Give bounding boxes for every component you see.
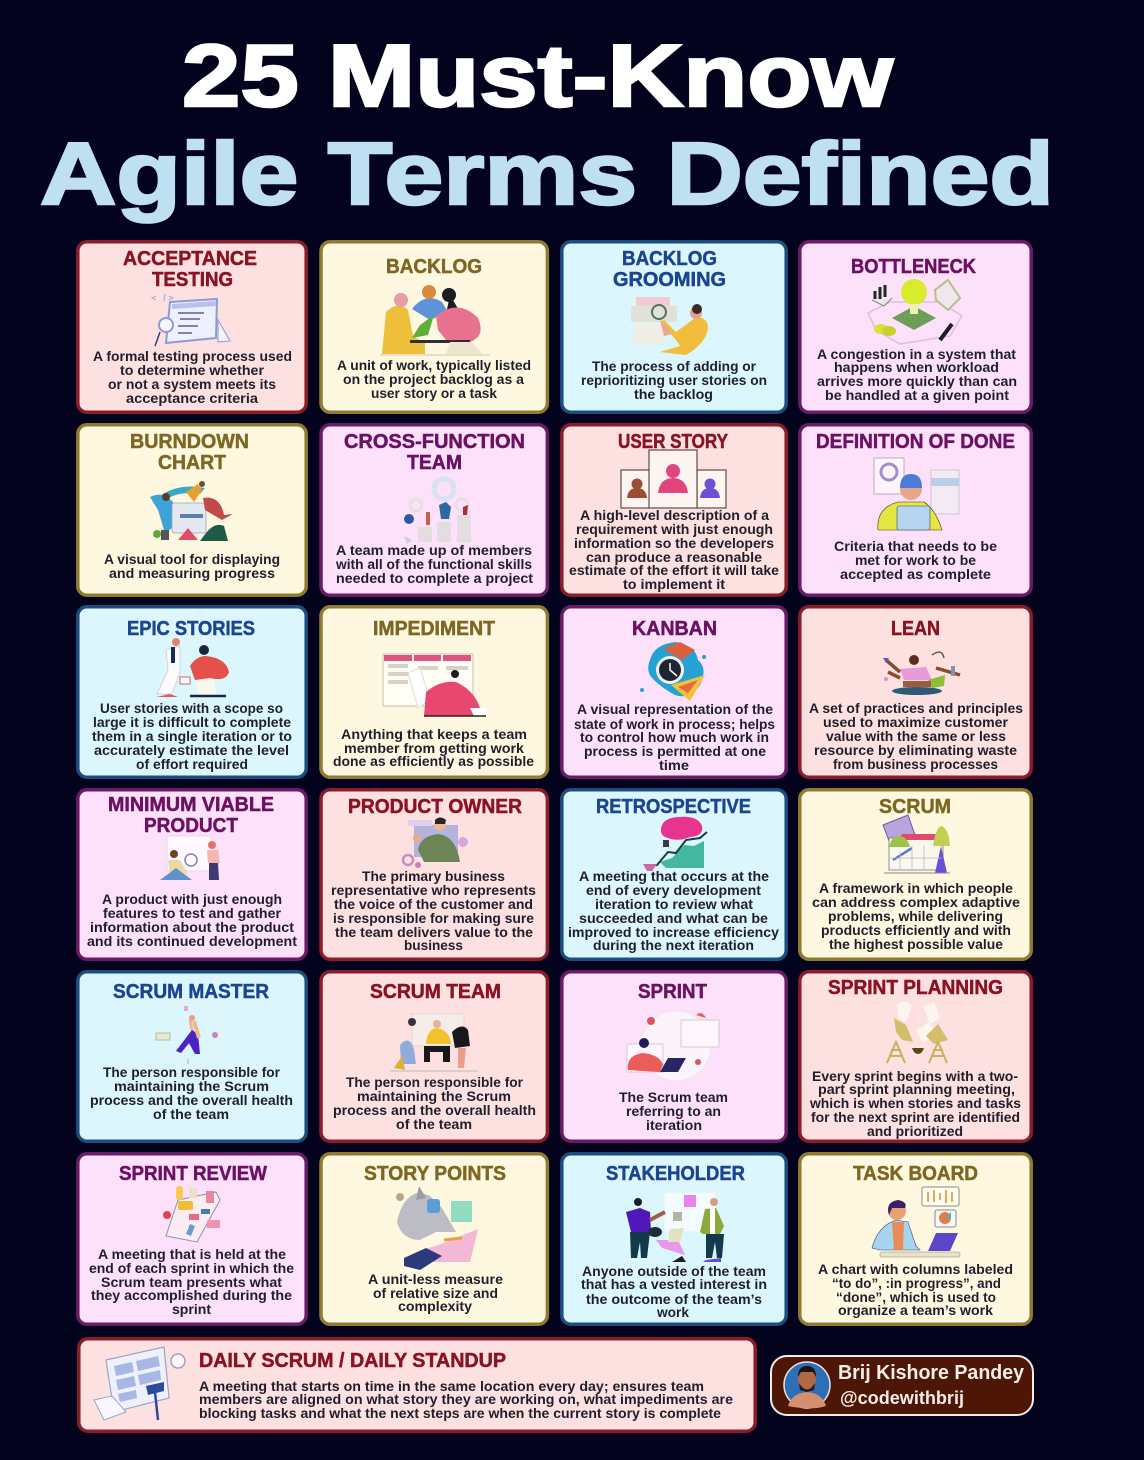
description: improved to increase efficiency bbox=[568, 924, 779, 940]
description: members are aligned on what story they are working on, what impediments are bbox=[199, 1391, 733, 1407]
panel: sprint planning bbox=[800, 972, 1031, 1141]
icon: isometric bulb and gears bbox=[868, 279, 962, 344]
description: the outcome of the team’s bbox=[586, 1291, 762, 1307]
panel: stakeholder bbox=[562, 1154, 786, 1324]
description: problems, while delivering bbox=[828, 908, 1003, 924]
description: or not a system meets its bbox=[108, 376, 276, 392]
icon: three people at a board bbox=[626, 1192, 724, 1262]
panel: daily scrum / daily standup bbox=[79, 1339, 755, 1431]
description: part sprint planning meeting, bbox=[818, 1081, 1015, 1097]
heading bbox=[123, 248, 257, 291]
panel: cross-function team bbox=[321, 425, 547, 595]
description: User stories with a scope so bbox=[100, 700, 283, 716]
author handle: @codewithbrij bbox=[840, 1388, 964, 1408]
description: features to test and gather bbox=[103, 905, 282, 921]
heading: EPIC STORIES bbox=[127, 618, 255, 640]
description: “to do”, :in progress”, and bbox=[832, 1275, 1001, 1291]
description bbox=[619, 1089, 728, 1133]
panel: burndown chart bbox=[78, 425, 306, 595]
description: used to maximize customer bbox=[823, 714, 1009, 730]
icon: team around a tablet bbox=[380, 285, 490, 355]
description: A meeting that occurs at the bbox=[579, 868, 769, 884]
description: iteration bbox=[646, 1117, 702, 1133]
description: can produce a reasonable bbox=[586, 549, 762, 565]
description: accurately estimate the level bbox=[94, 742, 289, 758]
icon: two business people bbox=[156, 638, 229, 697]
description: estimate of the effort it will take bbox=[569, 562, 779, 578]
heading: BURNDOWN bbox=[130, 431, 249, 453]
heading: BACKLOG bbox=[622, 248, 717, 270]
description: Criteria that needs to be bbox=[834, 538, 997, 554]
description: maintaining the Scrum bbox=[114, 1078, 269, 1094]
icon: developer with laptop and checklist bbox=[874, 458, 959, 530]
description: process and the overall health bbox=[90, 1092, 293, 1108]
description: large it is difficult to complete bbox=[93, 714, 291, 730]
title: 25 Must-Know bbox=[182, 26, 894, 125]
description: Every sprint begins with a two- bbox=[812, 1068, 1018, 1084]
heading bbox=[344, 431, 525, 474]
description: A framework in which people bbox=[819, 880, 1013, 896]
icon: multitasking meditating person bbox=[883, 652, 960, 695]
description bbox=[93, 348, 292, 406]
description: and prioritized bbox=[867, 1123, 963, 1139]
heading bbox=[613, 248, 726, 291]
description: A formal testing process used bbox=[93, 348, 292, 364]
panel: backlog grooming bbox=[562, 242, 786, 412]
panel: impediment bbox=[321, 607, 547, 777]
description bbox=[569, 507, 779, 592]
icon: person at kanban board bbox=[383, 654, 487, 716]
heading bbox=[108, 794, 274, 837]
description: value with the same or less bbox=[826, 728, 1006, 744]
description: of relative size and bbox=[373, 1285, 498, 1301]
heading: STORY POINTS bbox=[364, 1163, 506, 1185]
heading: MINIMUM VIABLE bbox=[108, 794, 274, 816]
description: iteration to review what bbox=[595, 896, 753, 912]
description: happens when workload bbox=[834, 359, 999, 375]
description: Anyone outside of the team bbox=[582, 1263, 766, 1279]
description: The person responsible for bbox=[346, 1074, 524, 1090]
icon: gears and pillars bbox=[404, 479, 471, 544]
description bbox=[809, 1068, 1021, 1139]
description: process is permitted at one bbox=[584, 743, 766, 759]
description: the backlog bbox=[634, 386, 713, 402]
description: The person responsible for bbox=[103, 1064, 281, 1080]
description: organize a team’s work bbox=[838, 1302, 993, 1318]
description: resource by eliminating waste bbox=[814, 742, 1017, 758]
icon: three user profile cards bbox=[621, 450, 726, 508]
heading: RETROSPECTIVE bbox=[596, 796, 751, 818]
description: end of each sprint in which the bbox=[89, 1260, 294, 1276]
description: A team made up of members bbox=[336, 542, 532, 558]
description bbox=[104, 551, 280, 581]
icon: task board on a stand bbox=[94, 1347, 185, 1420]
heading: PRODUCT bbox=[144, 815, 238, 837]
avatar bbox=[784, 1362, 830, 1408]
heading: SPRINT PLANNING bbox=[828, 977, 1003, 999]
description bbox=[87, 891, 297, 949]
description: they accomplished during the bbox=[91, 1287, 292, 1303]
description bbox=[581, 358, 767, 402]
icon: people on ladders with puzzle pieces bbox=[887, 1002, 948, 1063]
description: user story or a task bbox=[371, 385, 497, 401]
heading: TEAM bbox=[407, 452, 462, 474]
panel: retrospective bbox=[562, 790, 786, 959]
description bbox=[333, 1074, 536, 1132]
description bbox=[331, 868, 536, 953]
heading: CROSS-FUNCTION bbox=[344, 431, 525, 453]
description: representative who represents bbox=[331, 882, 536, 898]
description: during the next iteration bbox=[593, 937, 754, 953]
description: A meeting that is held at the bbox=[98, 1246, 286, 1262]
description: A meeting that starts on time in the same location every day; ensures team bbox=[199, 1378, 704, 1394]
description: complexity bbox=[398, 1298, 472, 1314]
heading: SPRINT REVIEW bbox=[119, 1163, 267, 1185]
heading: TESTING bbox=[152, 269, 233, 291]
description: “done”, which is used to bbox=[836, 1289, 996, 1305]
panel: bottleneck bbox=[800, 242, 1031, 412]
icon: code window under magnifier bbox=[152, 294, 230, 346]
description: of effort required bbox=[136, 756, 248, 772]
description: The process of adding or bbox=[592, 358, 757, 374]
heading: TASK BOARD bbox=[853, 1163, 978, 1185]
panel: lean bbox=[800, 607, 1031, 777]
description: member from getting work bbox=[344, 740, 524, 756]
heading: BOTTLENECK bbox=[851, 256, 976, 278]
description bbox=[335, 542, 533, 586]
heading: STAKEHOLDER bbox=[606, 1163, 746, 1185]
description: and its continued development bbox=[87, 933, 297, 949]
icon: person at laptop before a globe bbox=[627, 1011, 719, 1081]
panel: product owner bbox=[321, 790, 547, 959]
description: arrives more quickly than can bbox=[817, 373, 1017, 389]
panel: sprint review bbox=[78, 1154, 306, 1324]
heading: DAILY SCRUM / DAILY STANDUP bbox=[199, 1350, 506, 1372]
description: to control how much work in bbox=[580, 729, 769, 745]
description: business bbox=[404, 937, 463, 953]
description: can address complex adaptive bbox=[812, 894, 1020, 910]
description: A unit of work, typically listed bbox=[337, 357, 531, 373]
panel: sprint bbox=[562, 972, 786, 1141]
description: A high-level description of a bbox=[580, 507, 769, 523]
description: the team delivers value to the bbox=[335, 924, 533, 940]
panel: definition of done bbox=[800, 425, 1031, 595]
panel: epic stories bbox=[78, 607, 306, 777]
description bbox=[581, 1263, 767, 1320]
description: accepted as complete bbox=[840, 566, 991, 582]
icon: brain over rising chart bbox=[643, 817, 707, 871]
icon: team working together bbox=[390, 1014, 478, 1071]
description: to implement it bbox=[623, 576, 725, 592]
icon: person adjusting cards bbox=[631, 297, 708, 355]
description: requirement with just enough bbox=[576, 521, 773, 537]
title bbox=[40, 26, 1054, 223]
description: acceptance criteria bbox=[126, 390, 258, 406]
heading: SCRUM bbox=[879, 796, 951, 818]
panel: acceptance testing bbox=[78, 242, 306, 412]
description: A chart with columns labeled bbox=[818, 1261, 1013, 1277]
description: maintaining the Scrum bbox=[357, 1088, 511, 1104]
description: that has a vested interest in bbox=[581, 1276, 767, 1292]
description: time bbox=[659, 757, 689, 773]
heading: GROOMING bbox=[613, 269, 726, 291]
heading: IMPEDIMENT bbox=[373, 618, 495, 640]
description: information about the product bbox=[90, 919, 294, 935]
description: needed to complete a project bbox=[336, 570, 533, 586]
author badge bbox=[771, 1356, 1033, 1415]
description bbox=[834, 538, 997, 582]
description: A congestion in a system that bbox=[817, 346, 1016, 362]
description bbox=[337, 357, 531, 401]
description: sprint bbox=[172, 1301, 211, 1317]
description: them in a single iteration or to bbox=[92, 728, 292, 744]
description: Anything that keeps a team bbox=[341, 726, 527, 742]
heading: DEFINITION OF DONE bbox=[816, 431, 1015, 453]
description: reprioritizing user stories on bbox=[581, 372, 767, 388]
description: done as efficiently as possible bbox=[333, 753, 534, 769]
description: products efficiently and with bbox=[821, 922, 1011, 938]
heading: SPRINT bbox=[638, 981, 707, 1003]
description: A unit-less measure bbox=[368, 1271, 503, 1287]
description bbox=[89, 1246, 294, 1317]
heading: CHART bbox=[158, 452, 226, 474]
icon: person at laptop with charts bbox=[872, 1187, 960, 1257]
icon: phone with floating cards bbox=[163, 1186, 220, 1242]
description: and measuring progress bbox=[109, 565, 275, 581]
heading: KANBAN bbox=[632, 618, 717, 640]
description: referring to an bbox=[626, 1103, 721, 1119]
panel: minimum viable product bbox=[78, 790, 306, 959]
heading: USER STORY bbox=[618, 431, 729, 453]
panel: user story bbox=[562, 425, 786, 595]
heading: PRODUCT OWNER bbox=[348, 796, 523, 818]
description: process and the overall health bbox=[333, 1102, 536, 1118]
description: A visual representation of the bbox=[577, 701, 773, 717]
author name: Brij Kishore Pandey bbox=[838, 1362, 1025, 1384]
description bbox=[574, 701, 775, 773]
icon: two people inspecting a screen bbox=[160, 836, 220, 880]
panel: scrum team bbox=[321, 972, 547, 1141]
description: blocking tasks and what the next steps are when the current story is complete bbox=[199, 1405, 721, 1421]
description: of the team bbox=[153, 1106, 229, 1122]
heading: ACCEPTANCE bbox=[123, 248, 257, 270]
heading: SCRUM MASTER bbox=[113, 981, 270, 1003]
icon: people around monitor bbox=[150, 481, 233, 541]
panel: backlog bbox=[321, 242, 547, 412]
description: the highest possible value bbox=[829, 936, 1003, 952]
description: The primary business bbox=[362, 868, 505, 884]
description: on the project backlog as a bbox=[343, 371, 524, 387]
description: the voice of the customer and bbox=[334, 896, 533, 912]
icon: yoga figure in orbit bbox=[156, 1001, 222, 1065]
description: Scrum team presents what bbox=[101, 1274, 282, 1290]
icon: person in green sweater bbox=[403, 818, 468, 868]
description bbox=[818, 1261, 1013, 1318]
title: Agile Terms Defined bbox=[40, 124, 1054, 223]
panel: scrum bbox=[800, 790, 1031, 959]
description: of the team bbox=[396, 1116, 472, 1132]
description: work bbox=[656, 1304, 689, 1320]
description: end of every development bbox=[586, 882, 761, 898]
panel: task board bbox=[800, 1154, 1031, 1324]
description: from business processes bbox=[833, 756, 998, 772]
description: succeeded and what can be bbox=[579, 910, 768, 926]
description: A set of practices and principles bbox=[809, 700, 1023, 716]
description: A visual tool for displaying bbox=[104, 551, 280, 567]
description: to determine whether bbox=[120, 362, 265, 378]
description: met for work to be bbox=[855, 552, 976, 568]
description bbox=[333, 726, 534, 769]
icon: calendar with envelope and bell bbox=[883, 815, 950, 873]
description: state of work in process; helps bbox=[574, 716, 775, 732]
description: is responsible for making sure bbox=[333, 910, 534, 926]
panel: story points bbox=[321, 1154, 547, 1324]
description: for the next sprint are identified bbox=[811, 1109, 1020, 1125]
icon: robot over a map and book bbox=[396, 1186, 478, 1270]
panel: kanban bbox=[562, 607, 786, 777]
heading: BACKLOG bbox=[386, 256, 482, 278]
description: with all of the functional skills bbox=[335, 556, 532, 572]
description bbox=[199, 1378, 733, 1421]
description bbox=[368, 1271, 503, 1314]
description bbox=[809, 700, 1023, 772]
description bbox=[92, 700, 292, 772]
heading: LEAN bbox=[891, 618, 940, 640]
description: information so the developers bbox=[574, 535, 774, 551]
description bbox=[568, 868, 779, 953]
description: The Scrum team bbox=[619, 1089, 728, 1105]
description bbox=[90, 1064, 293, 1122]
description: be handled at a given point bbox=[825, 387, 1009, 403]
heading: SCRUM TEAM bbox=[370, 981, 501, 1003]
icon: clock and paper plane bbox=[640, 642, 706, 701]
description: A product with just enough bbox=[102, 891, 282, 907]
description bbox=[817, 346, 1017, 403]
description: which is when stories and tasks bbox=[809, 1095, 1021, 1111]
description bbox=[812, 880, 1020, 952]
panel: scrum master bbox=[78, 972, 306, 1141]
heading bbox=[130, 431, 249, 474]
